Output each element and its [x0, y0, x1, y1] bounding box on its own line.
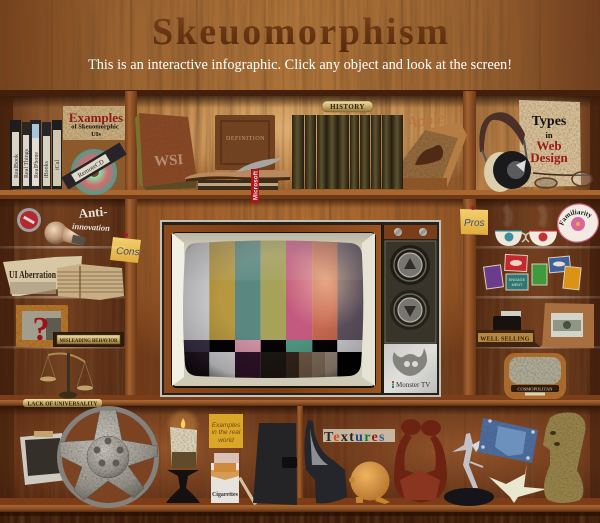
chalk text: Anti-innovation: [72, 204, 110, 233]
ransom letters: Textures: Textures: [324, 430, 386, 445]
picture frame: question mark: ?: [32, 311, 50, 348]
bookmark: Microsoft: [251, 169, 260, 203]
TV nameplate: Monster TV: [384, 344, 437, 393]
VHS tapes: Skeuomorphic UIs: RealPhone: [34, 152, 40, 178]
VHS tapes: Skeuomorphic UIs: Real Things: [24, 148, 30, 178]
VHS tapes: Skeuomorphic UIs: [10, 120, 62, 189]
candle on black stand: [166, 411, 200, 503]
headphones and glasses: [479, 112, 592, 192]
poster: Types in Web Design: Design: [530, 150, 569, 165]
retro radio: COSMOPOLITAN: [518, 386, 553, 392]
sticky note: Examples in the real world: in the real: [212, 429, 241, 436]
title: Skeuomorphism: [152, 11, 448, 53]
sticky note: Examples in the real world: [209, 414, 243, 448]
book: WSI: [135, 113, 197, 190]
balance scale: [40, 353, 93, 398]
light bulb: [44, 222, 86, 246]
plaque: Well selling: WELL SELLING: [480, 336, 530, 342]
paper origami crane: [489, 463, 547, 503]
newspaper: UI Aberration: [3, 256, 82, 296]
wallet with dollar bill: [493, 311, 521, 331]
book: Definition: [215, 115, 275, 170]
sticky note: Pros: Pros: [464, 218, 485, 229]
open book with quill: [185, 158, 290, 190]
CD disc: [71, 149, 117, 195]
VHS tape: RemoteCD: RemoteCD: [77, 158, 106, 179]
sticky note: Cons: Cons: [116, 246, 140, 258]
postage stamps: ENGAGE: [509, 278, 526, 282]
cork pig: [349, 462, 390, 504]
sticky note: Pros: [460, 206, 488, 235]
TV dial: channel up: [390, 245, 430, 285]
bookmark: Microsoft: Microsoft: [254, 171, 260, 200]
stack of papers: [57, 264, 124, 300]
sticky note: Examples in the real world: Examples: [212, 422, 241, 429]
TV screen colour bars: [183, 240, 364, 378]
cigarette pack: [211, 453, 257, 505]
denim pocket patch: [478, 418, 538, 463]
carved wooden knot: [394, 419, 447, 503]
row of old books: [292, 115, 403, 189]
poster: Examples of Skeuomorphic UIs: [63, 106, 125, 190]
poster: Examples of Skeuomorphic UIs: UIs: [91, 131, 101, 138]
black leather organizer: [253, 423, 297, 505]
poster: Types in Web Design: in: [545, 130, 553, 140]
picture frame: question mark: [16, 305, 68, 348]
chalk text: Anti-innovation: Anti-: [78, 204, 108, 221]
clay moai statue: [543, 413, 586, 503]
tea cups with steam: [495, 206, 557, 246]
car wheel hubcap: [57, 406, 159, 508]
VHS tapes: Skeuomorphic UIs: RealBook: [14, 154, 20, 178]
chalk text: Anti-innovation: innovation: [72, 221, 110, 233]
poster: Types in Web Design: [519, 100, 581, 187]
prohibition sign: [17, 208, 41, 232]
plaque: Misleading behavior: [53, 332, 124, 347]
VHS tapes: Skeuomorphic UIs: iCal: [55, 160, 61, 170]
photo with tape: [20, 431, 67, 485]
silver fairy statuette: [444, 433, 494, 506]
newspaper: UI Aberration: UI Aberration: [9, 270, 56, 281]
black leather shoe: [304, 420, 347, 503]
retro radio: [504, 353, 566, 399]
picture frame: dollar bill: [542, 303, 594, 348]
postage stamps: MENT: [512, 283, 523, 287]
VHS tapes: Skeuomorphic UIs: iBooks: [44, 160, 50, 178]
plate: Familiarity: Familiarity: [558, 210, 592, 226]
plaque: History: HISTORY: [330, 103, 365, 111]
poster: Examples of Skeuomorphic UIs: Examples: [69, 110, 123, 125]
plaque: Misleading behavior: MISLEADING BEHAVIOR: [60, 339, 118, 344]
TV nameplate: Monster TV: Monster TV: [396, 381, 430, 389]
etched text: Apple: Apple: [405, 110, 446, 132]
glass shelves left: [0, 246, 125, 348]
subtitle: This is an interactive infographic. Click any object and look at the screen!: [88, 57, 512, 73]
plate: Familiarity: [557, 203, 599, 243]
plaque: Well selling: [476, 330, 541, 347]
book: WSI: WSI: [154, 152, 184, 170]
sticky note: Cons: [110, 233, 141, 263]
book: Definition: DEFINITION: [226, 136, 265, 142]
plaque: Lack of universality: [23, 399, 102, 407]
sticky note: Examples in the real world: world: [218, 437, 234, 444]
VHS tape: RemoteCD: [61, 142, 127, 190]
cigarette pack: Cigarettes: [212, 492, 239, 498]
poster: Types in Web Design: Web: [536, 138, 562, 153]
book: Apple: [403, 122, 467, 189]
plaque: History: [322, 101, 373, 112]
TV dial: channel down: [390, 290, 430, 330]
plaque: Lack of universality: LACK OF UNIVERSALITY: [28, 401, 98, 407]
postage stamps: [484, 254, 581, 290]
retro television: [160, 220, 441, 397]
poster: Examples of Skeuomorphic UIs: of Skeuomorphic: [71, 124, 119, 130]
glass shelves right: [476, 246, 600, 348]
poster: Types in Web Design: Types: [532, 114, 567, 129]
